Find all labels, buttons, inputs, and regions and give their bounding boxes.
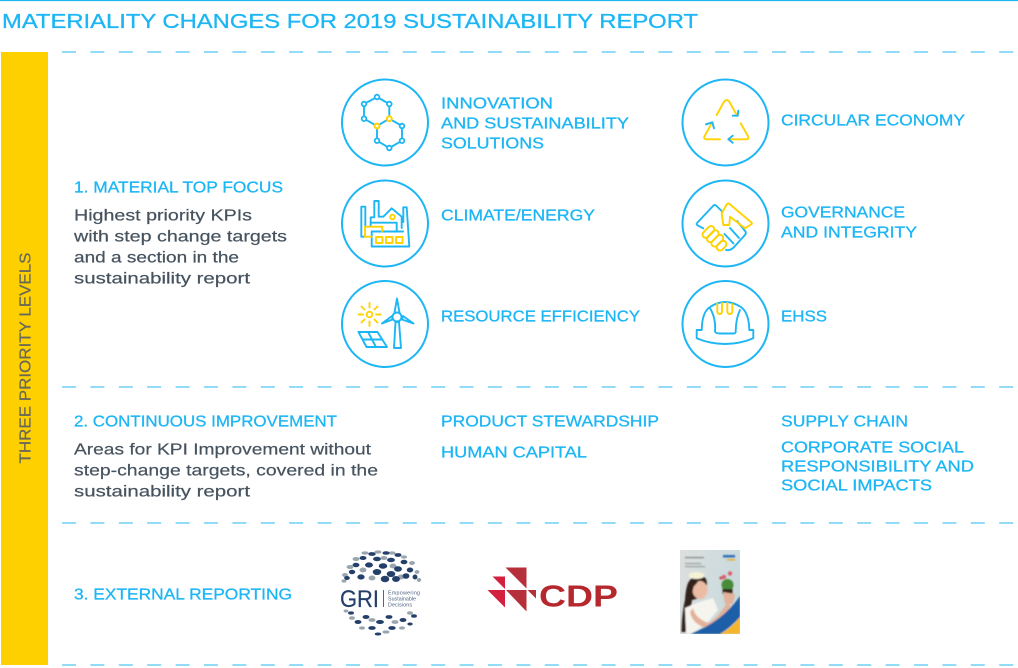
label: governance and integrity: GOVERNANCE — [781, 204, 905, 222]
title: MATERIALITY CHANGES FOR 2019 SUSTAINABILITY REPORT — [2, 10, 699, 33]
label: resource efficiency: RESOURCE EFFICIENCY — [441, 308, 640, 326]
panel: level 1 description: 1. MATERIAL TOP FOCUS — [74, 180, 283, 196]
side bar: three priority levels — [1, 52, 48, 665]
label: innovation: INNOVATION — [441, 96, 553, 112]
label: innovation: SOLUTIONS — [441, 136, 544, 152]
side bar: three priority levels: THREE PRIORITY LEVELS — [18, 252, 34, 464]
label: EHSS: EHSS — [781, 308, 827, 326]
label: corporate social responsibility — [781, 440, 974, 494]
panel: level 1 description: and a section in the — [74, 250, 239, 266]
label: corporate social responsibility: SOCIAL IMPACTS — [781, 478, 932, 494]
logo: CDP — [488, 568, 618, 614]
icon: resource efficiency — [342, 281, 428, 367]
label: human capital: HUMAN CAPITAL — [441, 444, 587, 462]
logo: CDP: CDP — [539, 578, 618, 614]
label: innovation — [441, 96, 629, 152]
panel: level 2 description: Areas for KPI Improvement without — [74, 442, 372, 458]
panel: level 2 description: sustainability report — [74, 484, 251, 500]
icon: circular economy — [682, 80, 768, 166]
label: circular economy: CIRCULAR ECONOMY — [781, 112, 965, 130]
label: governance and integrity: AND INTEGRITY — [781, 224, 917, 242]
panel: level 2 description — [74, 414, 378, 500]
panel: level 1 description: Highest priority KPIs — [74, 208, 252, 224]
logo: GRI: GRI — [340, 586, 379, 613]
label: corporate social responsibility: CORPORATE SOCIAL — [781, 440, 964, 456]
icon: governance handshake — [682, 180, 768, 266]
logo: GRI — [340, 551, 421, 635]
label: innovation: AND SUSTAINABILITY — [441, 116, 629, 132]
logo: GRI: Sustainable — [388, 596, 416, 602]
logo: GRI: Decisions — [388, 602, 412, 608]
panel: level 1 description: with step change targets — [73, 228, 287, 246]
icon: EHSS helmet — [682, 281, 768, 367]
panel: level 1 description: sustainability report — [74, 270, 251, 288]
label: climate/energy: CLIMATE/ENERGY — [441, 208, 595, 224]
label: corporate social responsibility: RESPONSIBILITY AND — [781, 458, 974, 476]
icon: innovation hexagons — [342, 80, 428, 166]
heading: external reporting: 3. EXTERNAL REPORTING — [74, 586, 292, 604]
label: governance and integrity — [781, 204, 917, 242]
label: supply chain: SUPPLY CHAIN — [781, 414, 908, 430]
logo: GRI: Empowering — [388, 590, 420, 596]
panel: level 1 description — [73, 180, 287, 288]
panel: level 2 description: step-change targets, covered in the — [74, 462, 378, 480]
icon: climate factory — [342, 180, 428, 266]
panel: level 2 description: 2. CONTINUOUS IMPROVEMENT — [74, 414, 337, 430]
report cover thumbnail — [680, 550, 740, 634]
label: product stewardship: PRODUCT STEWARDSHIP — [441, 414, 659, 430]
